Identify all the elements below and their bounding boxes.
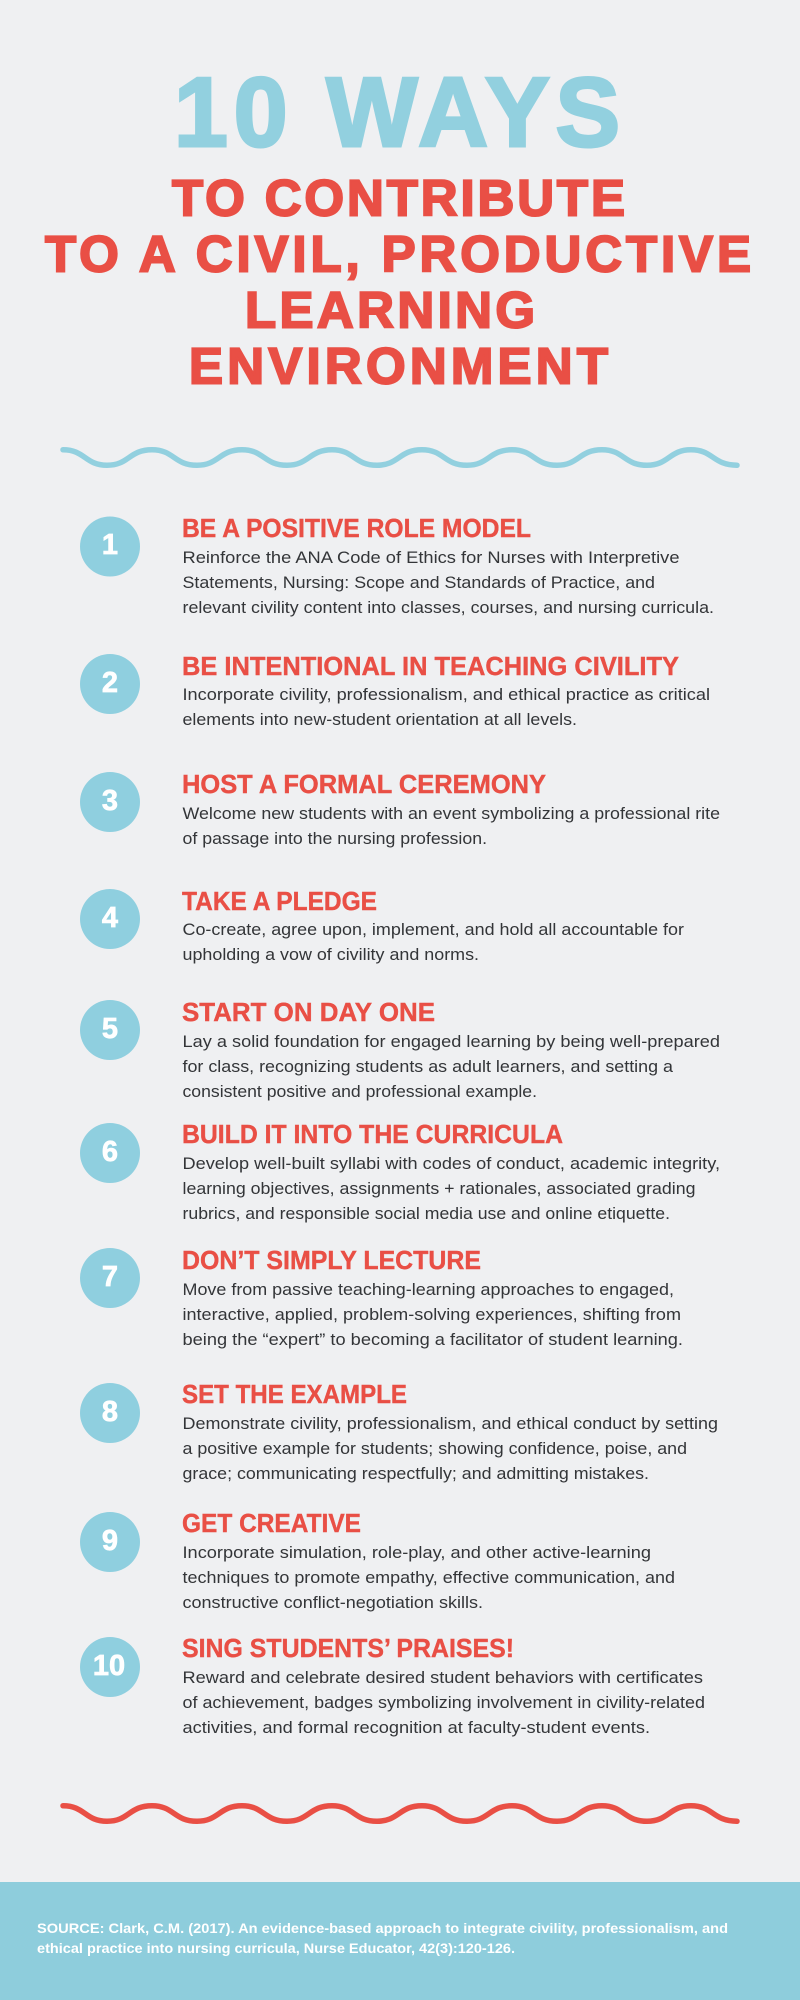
- title: 10 ways: 10 WAYS: [174, 57, 626, 167]
- body 5: Lay a solid foundation for engaged learning by being well-prepared: [182, 1033, 720, 1051]
- badge 8: [80, 1383, 140, 1443]
- subtitle: ENVIRONMENT: [189, 338, 608, 394]
- body 10: [182, 1669, 705, 1737]
- body 3: of passage into the nursing profession.: [182, 830, 487, 848]
- wave divider: blue: [63, 450, 737, 465]
- item 10: [80, 1635, 705, 1737]
- body 1: Reinforce the ANA Code of Ethics for Nurses with Interpretive: [182, 549, 680, 567]
- badge 7: 7: [102, 1261, 118, 1293]
- body 9: [182, 1544, 675, 1612]
- source citation: ethical practice into nursing curricula, Nurse Educator, 42(3):120-126.: [37, 1940, 515, 1956]
- body 5: for class, recognizing students as adult learners, and setting a: [182, 1058, 674, 1076]
- body 1: relevant civility content into classes, courses, and nursing curricula.: [182, 599, 714, 617]
- source citation: [37, 1920, 728, 1956]
- source citation: SOURCE: Clark, C.M. (2017). An evidence-based approach to integrate civility, professionalism, and: [37, 1920, 728, 1936]
- subtitle: TO A CIVIL, PRODUCTIVE: [45, 226, 751, 282]
- body 9: constructive conflict-negotiation skills.: [182, 1594, 483, 1612]
- badge 9: [80, 1512, 140, 1572]
- subtitle: LEARNING: [245, 282, 535, 338]
- badge 10: [80, 1637, 140, 1697]
- body 2: [182, 686, 710, 729]
- body 8: a positive example for students; showing confidence, poise, and: [182, 1440, 687, 1458]
- item 5: [80, 999, 720, 1101]
- heading 7: DON’T SIMPLY LECTURE: [182, 1247, 481, 1275]
- item 7: [80, 1247, 683, 1349]
- heading 8: SET THE EXAMPLE: [182, 1381, 407, 1409]
- heading 5: START ON DAY ONE: [182, 999, 435, 1027]
- item 4: [80, 888, 685, 964]
- body 7: [182, 1281, 683, 1349]
- badge 6: 6: [102, 1136, 118, 1168]
- badge 8: 8: [102, 1396, 118, 1428]
- subtitle: TO CONTRIBUTE: [172, 170, 625, 226]
- body 8: Demonstrate civility, professionalism, and ethical conduct by setting: [182, 1415, 718, 1433]
- badge 2: 2: [102, 667, 118, 699]
- body 7: Move from passive teaching-learning approaches to engaged,: [182, 1281, 674, 1299]
- heading 9: GET CREATIVE: [182, 1510, 361, 1538]
- item 1: [80, 515, 714, 617]
- heading 4: TAKE A PLEDGE: [182, 888, 377, 916]
- badge 9: 9: [102, 1525, 118, 1557]
- body 7: being the “expert” to becoming a facilitator of student learning.: [182, 1331, 683, 1349]
- heading 6: BUILD IT INTO THE CURRICULA: [182, 1121, 563, 1149]
- body 6: rubrics, and responsible social media use and online etiquette.: [182, 1205, 670, 1223]
- body 5: consistent positive and professional example.: [182, 1083, 537, 1101]
- badge 4: 4: [102, 902, 118, 934]
- body 9: Incorporate simulation, role-play, and other active-learning: [182, 1544, 651, 1562]
- body 8: grace; communicating respectfully; and admitting mistakes.: [182, 1465, 649, 1483]
- body 4: upholding a vow of civility and norms.: [182, 946, 479, 964]
- body 4: [182, 921, 685, 964]
- badge 1: [80, 516, 140, 576]
- badge 2: [80, 654, 140, 714]
- body 1: Statements, Nursing: Scope and Standards of Practice, and: [182, 574, 655, 592]
- body 7: interactive, applied, problem-solving experiences, shifting from: [182, 1306, 681, 1324]
- body 10: activities, and formal recognition at faculty-student events.: [182, 1719, 650, 1737]
- body 2: elements into new-student orientation at all levels.: [182, 711, 577, 729]
- badge 1: 1: [102, 529, 118, 561]
- badge 4: [80, 889, 140, 949]
- body 3: Welcome new students with an event symbolizing a professional rite: [182, 805, 720, 823]
- body 1: [182, 549, 714, 617]
- body 8: [182, 1415, 718, 1483]
- heading 1: BE A POSITIVE ROLE MODEL: [182, 515, 531, 543]
- body 10: of achievement, badges symbolizing involvement in civility-related: [182, 1694, 705, 1712]
- subtitle: [45, 170, 751, 394]
- badge 3: [80, 772, 140, 832]
- body 3: [182, 805, 720, 848]
- heading 10: SING STUDENTS’ PRAISES!: [182, 1635, 514, 1663]
- body 9: techniques to promote empathy, effective communication, and: [182, 1569, 675, 1587]
- body 5: [182, 1033, 720, 1101]
- body 6: Develop well-built syllabi with codes of conduct, academic integrity,: [182, 1155, 720, 1173]
- badge 7: [80, 1248, 140, 1308]
- body 2: Incorporate civility, professionalism, and ethical practice as critical: [182, 686, 710, 704]
- badge 3: 3: [102, 785, 118, 817]
- heading 3: HOST A FORMAL CEREMONY: [182, 771, 546, 799]
- heading 2: BE INTENTIONAL IN TEACHING CIVILITY: [182, 653, 679, 681]
- footer band: [0, 1882, 800, 2000]
- badge 10: 10: [93, 1650, 125, 1682]
- body 6: [182, 1155, 720, 1223]
- body 4: Co-create, agree upon, implement, and hold all accountable for: [182, 921, 685, 939]
- item 2: [80, 653, 710, 729]
- item 8: [80, 1381, 718, 1483]
- badge 5: [80, 1000, 140, 1060]
- item 9: [80, 1510, 675, 1612]
- body 6: learning objectives, assignments + rationales, associated grading: [182, 1180, 696, 1198]
- item 6: [80, 1121, 720, 1223]
- item 3: [80, 771, 720, 848]
- badge 5: 5: [102, 1013, 118, 1045]
- badge 6: [80, 1123, 140, 1183]
- wave divider: red: [63, 1806, 737, 1821]
- body 10: Reward and celebrate desired student behaviors with certificates: [182, 1669, 703, 1687]
